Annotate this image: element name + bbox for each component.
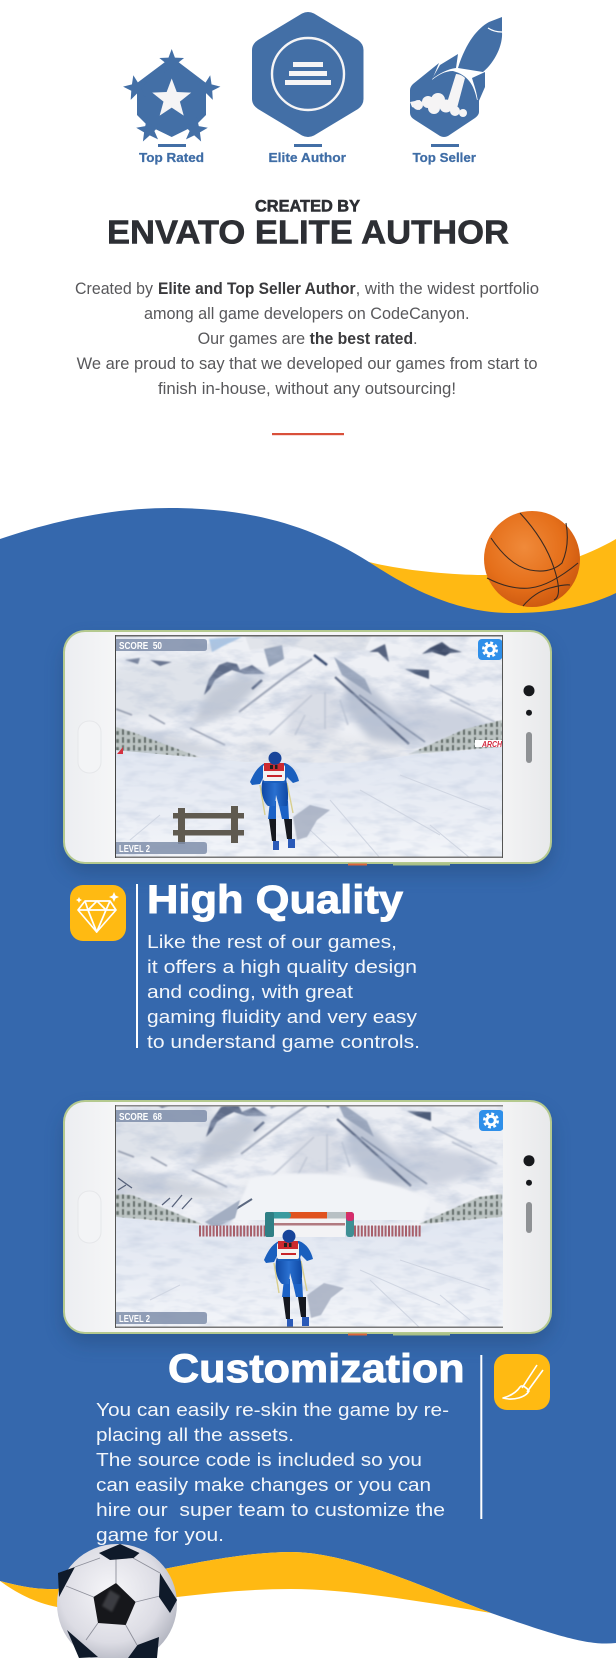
icon: diamond bbox=[70, 885, 126, 941]
game screen: ski slope with mountains: SCORE 50 bbox=[119, 641, 162, 652]
divider: high quality bbox=[136, 884, 138, 1048]
text: customization description: hire our super team to customize the bbox=[96, 1499, 445, 1520]
fence bbox=[173, 806, 244, 844]
phone: high quality screenshot bbox=[63, 600, 552, 874]
intro paragraph: Our games are bbox=[198, 330, 305, 348]
text: customization description bbox=[96, 1399, 449, 1545]
intro paragraph: the best rated bbox=[310, 330, 413, 348]
intro paragraph: We are proud to say that we developed our games from start to bbox=[77, 355, 538, 373]
intro paragraph: Elite and Top Seller Author bbox=[158, 280, 356, 298]
badge: top rated: Top Rated bbox=[139, 150, 204, 165]
heading: envato elite author: ENVATO ELITE AUTHOR bbox=[107, 214, 509, 250]
text: high quality description: and coding, with great bbox=[147, 981, 353, 1002]
heading: created by: CREATED BY bbox=[255, 196, 361, 216]
badge: top rated bbox=[121, 49, 222, 165]
badge: top seller bbox=[410, 17, 502, 165]
badges row bbox=[121, 12, 502, 165]
game screen: finish gate bbox=[115, 1105, 503, 1328]
icon: soccer ball bbox=[57, 1544, 177, 1658]
text: high quality description: gaming fluidity and very easy bbox=[147, 1006, 418, 1027]
skier bbox=[264, 1230, 344, 1328]
text: high quality description: Like the rest of our games, bbox=[147, 931, 397, 952]
text: high quality description: it offers a high quality design bbox=[147, 956, 417, 977]
text: customization description: You can easily re-skin the game by re- bbox=[96, 1399, 449, 1420]
wave: top yellow bbox=[369, 539, 616, 640]
divider: customization bbox=[480, 1355, 482, 1519]
game screen: finish gate: SCORE 68 bbox=[119, 1112, 162, 1123]
icon: basketball bbox=[484, 511, 580, 607]
intro paragraph bbox=[75, 280, 539, 398]
game screen: finish gate: LEVEL 2 bbox=[119, 1314, 150, 1325]
intro paragraph: among all game developers on CodeCanyon. bbox=[144, 305, 470, 323]
text: high quality description bbox=[147, 931, 420, 1052]
finish gate and barriers bbox=[199, 1212, 422, 1237]
text: customization description: The source code is included so you bbox=[96, 1449, 422, 1470]
game screen: ski slope with mountains: ARCH bbox=[481, 740, 502, 749]
background: blue wave panel bbox=[0, 508, 616, 1644]
game screen: ski slope with mountains bbox=[115, 635, 503, 858]
icon: paint brush bbox=[494, 1354, 550, 1410]
phone: customization screenshot bbox=[60, 1100, 556, 1348]
heading: customization: Customization bbox=[168, 1347, 464, 1391]
intro paragraph: finish in-house, without any outsourcing! bbox=[158, 380, 456, 398]
text: high quality description: to understand game controls. bbox=[147, 1031, 420, 1052]
wave: bottom yellow bbox=[0, 1552, 491, 1613]
text: customization description: game for you. bbox=[96, 1524, 224, 1545]
badge: elite author: Elite Author bbox=[268, 150, 346, 165]
text: customization description: can easily make changes or you can bbox=[96, 1474, 431, 1495]
heading: high quality: High Quality bbox=[147, 878, 404, 922]
skier bbox=[250, 752, 330, 850]
badge: top seller: Top Seller bbox=[412, 150, 476, 165]
text: customization description: placing all the assets. bbox=[96, 1424, 294, 1445]
intro paragraph: Created by bbox=[75, 280, 154, 298]
game screen: ski slope with mountains: LEVEL 2 bbox=[119, 844, 150, 855]
intro paragraph: . bbox=[413, 330, 418, 348]
intro paragraph: , with the widest portfolio bbox=[356, 280, 539, 298]
badge: elite author bbox=[252, 12, 364, 165]
divider: red rule bbox=[272, 433, 344, 435]
